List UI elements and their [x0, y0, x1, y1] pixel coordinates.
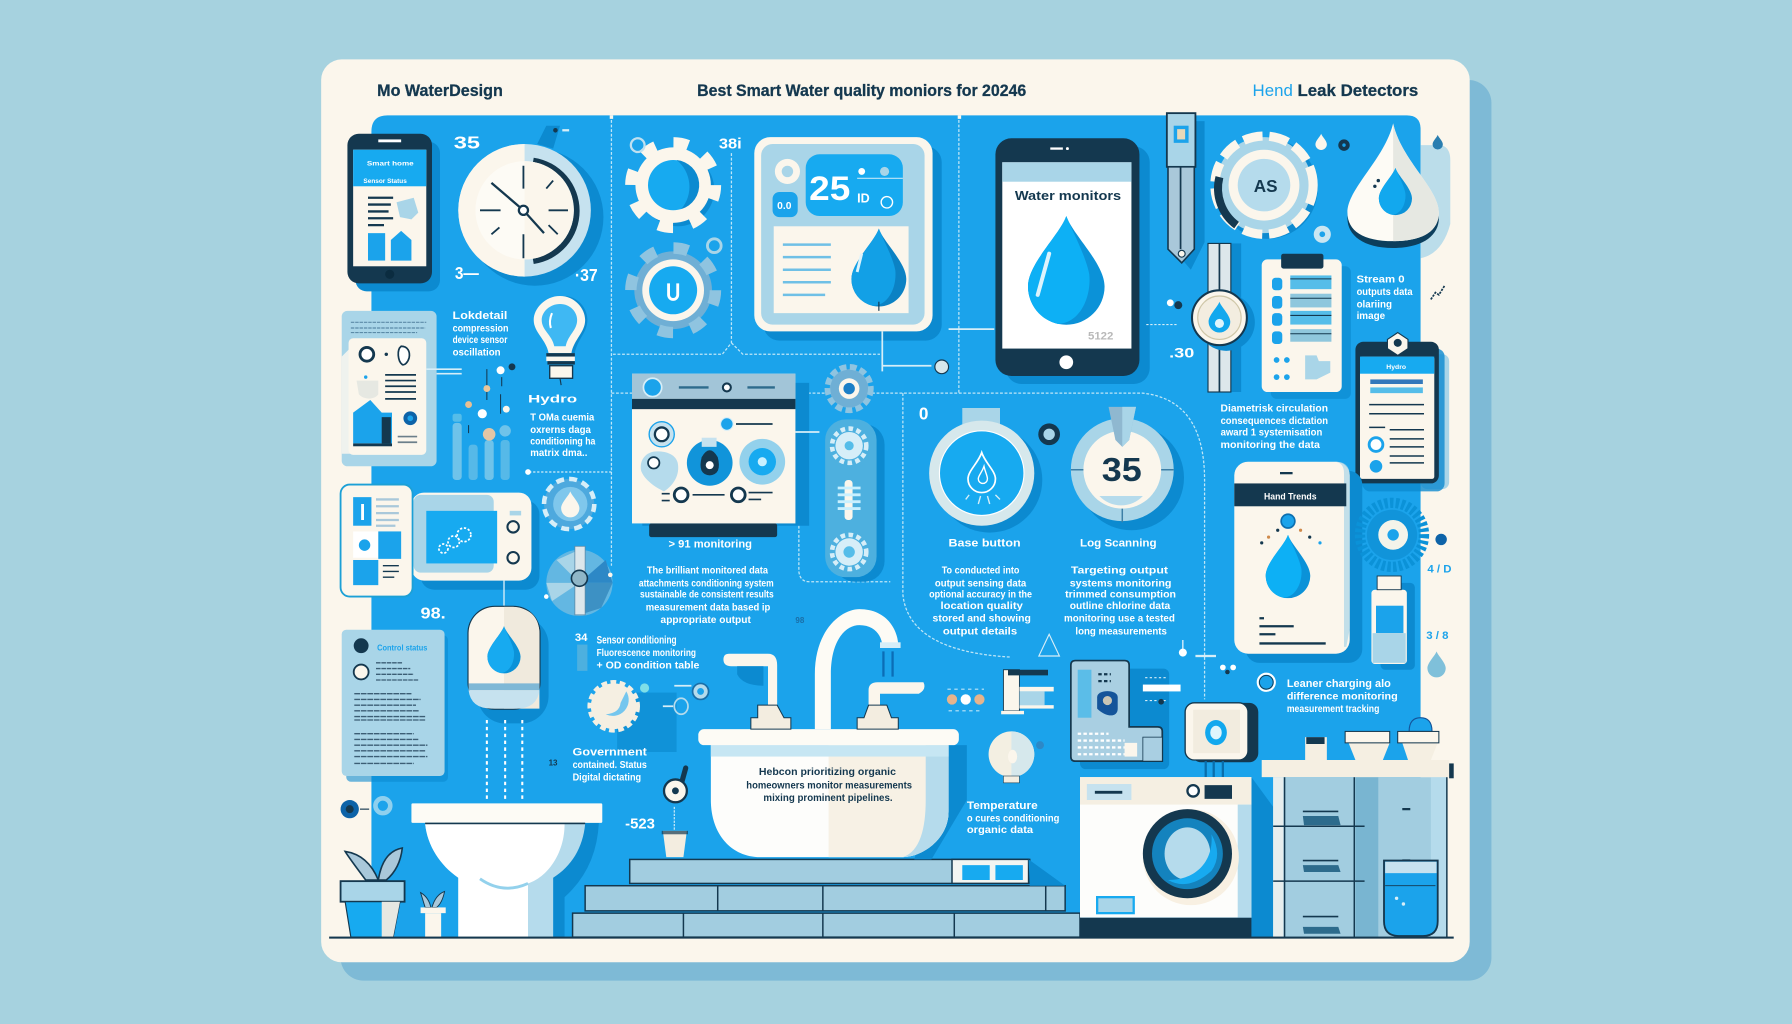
gauge 35 — [1071, 407, 1184, 530]
cube sensor — [1185, 703, 1258, 777]
text block: monitoring: attachments conditioning system — [639, 578, 774, 589]
washing machine — [1080, 777, 1273, 937]
sink text: homeowners monitor measurements — [746, 781, 912, 792]
blue background panel — [371, 115, 1421, 937]
header: left brand: Mo WaterDesign — [377, 81, 503, 100]
text block: temperature — [967, 800, 1059, 836]
text block: left detail: oscillation — [453, 347, 501, 358]
text block: monitoring: 98 — [795, 616, 805, 625]
gear with drop — [544, 479, 594, 529]
toilet — [411, 803, 602, 937]
report text block: consequences dictation — [1221, 416, 1328, 427]
text block: lower: 13 — [549, 759, 558, 768]
globe sensor — [989, 731, 1044, 783]
round sensor: 0 — [919, 403, 928, 423]
gauge 35: 35 — [1102, 452, 1142, 489]
document panel: lower left: Control status — [377, 642, 428, 652]
text block: log scanning: systems monitoring — [1070, 578, 1171, 589]
text block: ring note: difference monitoring — [1287, 691, 1398, 702]
text block: monitoring: appropriate output — [661, 615, 752, 626]
gear: cream — [631, 138, 715, 227]
small plant — [421, 891, 446, 937]
tablet with water monitors: 5122 — [1088, 330, 1113, 342]
cabinet — [1262, 760, 1454, 937]
text block: hydro: oxrerns daga — [530, 425, 591, 436]
window dashboard — [632, 374, 809, 537]
knob and small cup: -523 — [625, 817, 655, 833]
text block: monitoring: The brilliant monitored data — [647, 566, 768, 577]
pen-shaped sensor — [1167, 113, 1205, 270]
water glass — [1384, 861, 1438, 936]
text block: log scanning: long measurements — [1075, 626, 1167, 637]
text block: base button: Base button — [949, 537, 1021, 549]
text block: log scanning: Log Scanning — [1080, 537, 1157, 549]
sink text: Hebcon prioritizing organic — [759, 767, 896, 778]
connectors — [795, 331, 931, 432]
label 98: 98. — [421, 605, 446, 622]
clock labels: ·37 — [575, 265, 598, 285]
gear with rings — [590, 682, 709, 752]
text block: hydro — [525, 393, 611, 475]
phone with report: Sensor Status — [363, 178, 407, 185]
text block: ring note: Leaner charging alo — [1287, 678, 1391, 690]
text block: base button — [929, 537, 1032, 637]
document panel: left — [342, 311, 462, 466]
report text block — [1221, 403, 1328, 451]
round sensor — [919, 403, 1060, 533]
status indicator dots — [341, 798, 390, 818]
document panel: lower left — [342, 630, 448, 782]
text block: ring note: measurement tracking — [1287, 704, 1379, 715]
small droplet — [1433, 135, 1443, 149]
watch sensor — [949, 243, 1255, 392]
text block: base button: location quality — [941, 601, 1023, 612]
sink text — [746, 767, 912, 804]
note text right: Stream 0 — [1357, 274, 1405, 285]
text block: base button: To conducted into — [942, 566, 1019, 577]
watch sensor: .30 — [1169, 346, 1195, 361]
phone with report: Smart home — [367, 161, 414, 168]
card shadow — [341, 80, 1491, 981]
small tap icon — [1001, 670, 1054, 714]
text block: ring note — [1258, 674, 1398, 715]
control panel: 0.0 — [777, 201, 792, 212]
text block: left detail: compression — [453, 323, 509, 334]
knob and small cup — [625, 768, 688, 857]
text block: lower: Government — [573, 746, 647, 758]
text block with icons: Fluorescence monitoring — [597, 648, 696, 659]
tablet with water monitors: Water monitors — [1015, 188, 1121, 203]
checklist card — [1262, 254, 1351, 399]
side labels and droplet: 3 / 8 — [1426, 630, 1448, 642]
tablet with water monitors — [995, 138, 1150, 384]
sink basin — [698, 729, 967, 859]
note text right: outputs data — [1357, 287, 1413, 298]
stacked tiles — [573, 859, 1080, 937]
panel notch dividers — [610, 115, 961, 119]
blue gear and dot — [1360, 503, 1447, 567]
smartphone with drop — [1234, 462, 1362, 663]
text block with icons: Sensor conditioning — [597, 634, 677, 646]
text block: log scanning: Targeting output — [1071, 566, 1169, 577]
note text right: image — [1357, 311, 1386, 322]
text block: base button: stored and showing — [933, 614, 1031, 625]
text block: hydro: matrix dma.. — [530, 448, 588, 459]
text block: monitoring — [639, 538, 805, 626]
text block: temperature: organic data — [967, 825, 1034, 836]
filter machine — [1071, 661, 1181, 769]
clock — [458, 126, 603, 286]
header: right label: Hend Leak Detectors — [1253, 81, 1418, 100]
text block: hydro: T OMa cuemia — [530, 413, 595, 424]
text block: base button: output sensing data — [935, 578, 1027, 589]
text block: left detail: device sensor — [453, 335, 507, 346]
text block: monitoring: sustainable de consistent results — [640, 590, 774, 601]
fan sensor — [544, 546, 613, 616]
text block: left detail: Lokdetail — [453, 310, 507, 322]
note text right — [1357, 274, 1445, 322]
swatch dots — [947, 689, 985, 711]
control panel — [754, 137, 942, 341]
note text right: olariing — [1357, 299, 1392, 310]
text block with icons: + OD condition table — [597, 661, 700, 672]
bar chart with dots — [453, 363, 515, 480]
clock labels: 38i — [719, 137, 742, 153]
gear with AS label: AS — [1254, 176, 1278, 196]
info cards — [341, 485, 413, 597]
faucet — [723, 609, 924, 729]
phone with report — [347, 134, 440, 291]
potted plant — [341, 848, 405, 937]
counter items — [1305, 718, 1439, 760]
gear with AS label — [1215, 134, 1350, 243]
small warning icon and pin — [1039, 634, 1236, 674]
text block: hydro: conditioning ha — [530, 437, 596, 448]
text block: monitoring: measurement data based ip — [646, 602, 770, 613]
gear: settings — [631, 239, 721, 333]
report text block: Diametrisk circulation — [1221, 403, 1328, 414]
bottle — [1371, 576, 1415, 670]
drop dispenser — [467, 606, 549, 723]
report text block: award 1 systemisation — [1221, 427, 1322, 438]
side labels and droplet — [1426, 564, 1452, 677]
text block: log scanning: monitoring use a tested — [1064, 614, 1175, 625]
report text block: monitoring the data — [1221, 440, 1320, 451]
clock labels: 3— — [455, 263, 480, 283]
tile windows — [962, 865, 1023, 880]
text block: left detail — [453, 310, 509, 358]
lightbulb — [534, 296, 587, 385]
text block: base button: optional accuracy in the — [929, 590, 1032, 601]
dashed connector lines — [611, 115, 1205, 699]
clipboard report — [1355, 333, 1449, 491]
clock labels: 35 — [454, 133, 481, 153]
text block: log scanning: trimmed consumption — [1065, 590, 1176, 601]
floor line — [329, 937, 1454, 939]
text block: temperature: o cures conditioning — [967, 814, 1059, 825]
text block: lower: Digital dictating — [573, 773, 641, 784]
text block: lower: contained. Status — [573, 760, 647, 771]
text block: monitoring: > 91 monitoring — [669, 538, 752, 550]
connector to dispenser — [503, 581, 505, 606]
control panel: ID — [857, 191, 870, 205]
text block with icons: 34 — [575, 632, 588, 644]
text block: lower — [549, 746, 647, 784]
text block: log scanning — [1064, 537, 1176, 637]
light patch behind big drop — [1421, 145, 1450, 258]
text block: base button: output details — [943, 626, 1018, 637]
dripping lines — [487, 720, 522, 802]
main card — [321, 59, 1470, 962]
clipboard report: Hydro — [1386, 364, 1406, 371]
gear strip — [825, 367, 885, 582]
control panel: 25 — [809, 170, 850, 208]
text block: temperature: Temperature — [967, 800, 1038, 812]
small ring node — [935, 360, 949, 374]
title: Best Smart Water quality moniors for 20246 — [697, 81, 1026, 100]
tile shadow — [1029, 859, 1065, 886]
clock labels — [454, 133, 742, 285]
big water drop device — [1347, 123, 1439, 248]
device with screen — [411, 493, 539, 590]
smartphone with drop: Hand Trends — [1264, 491, 1317, 501]
text block: log scanning: outline chlorine data — [1070, 601, 1171, 612]
sink text: mixing prominent pipelines. — [763, 793, 893, 804]
text block with icons — [575, 632, 700, 672]
text block: hydro: Hydro — [528, 393, 577, 405]
side labels and droplet: 4 / D — [1427, 564, 1452, 576]
